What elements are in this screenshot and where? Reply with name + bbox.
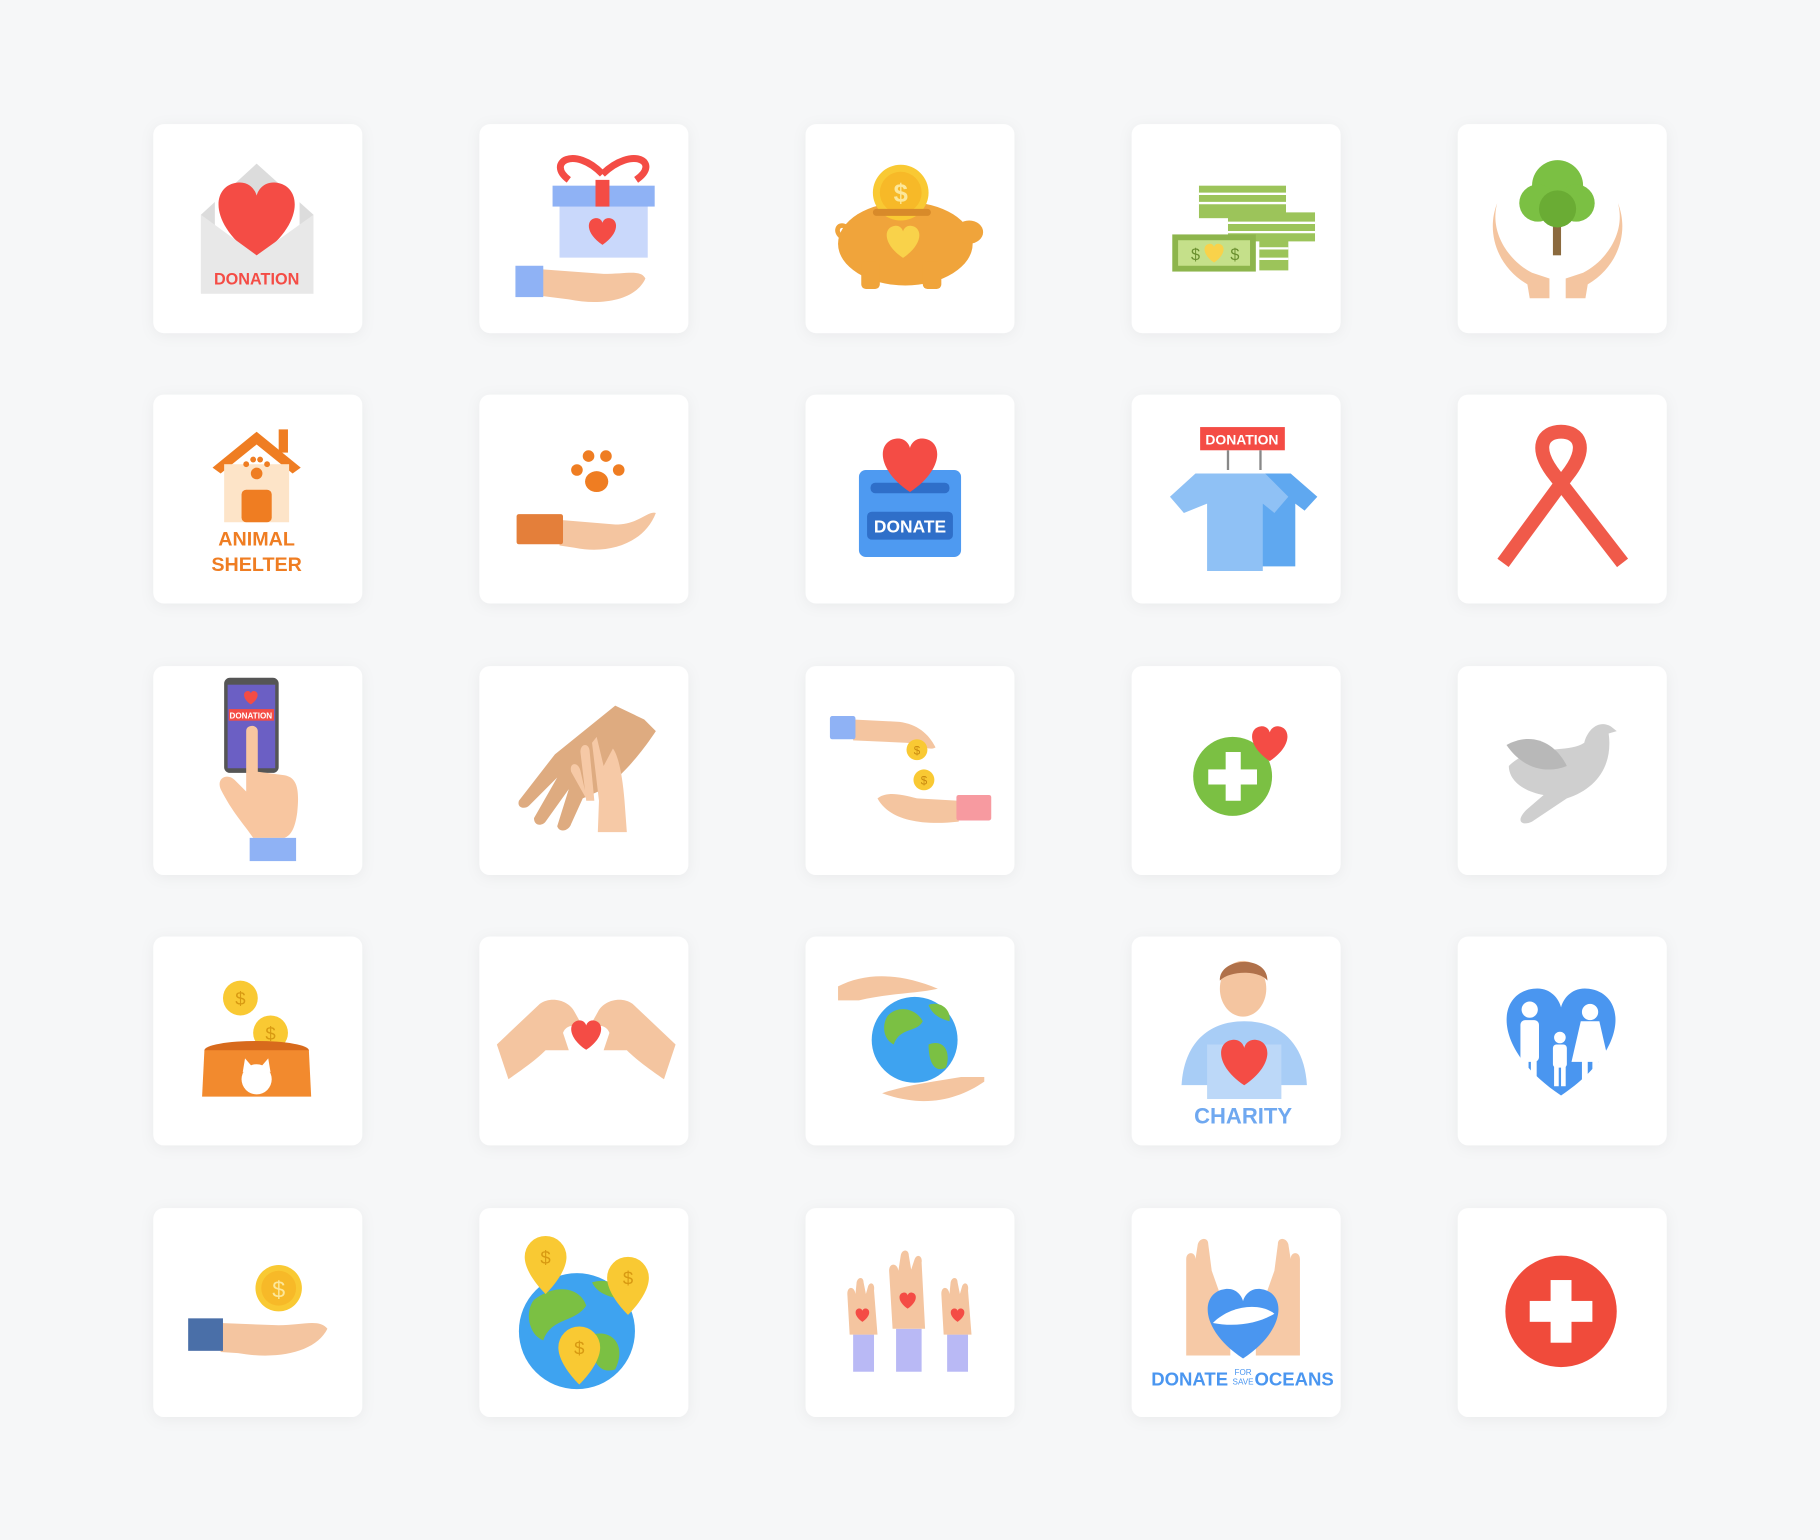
icon: animal shelter: ANIMAL (218, 528, 295, 550)
icon: phone donation (220, 678, 298, 861)
icon: hands with tree (1493, 160, 1622, 298)
icon: raised hands (847, 1250, 972, 1372)
icon: money stacks: $ (1230, 246, 1239, 264)
icon: cat bowl with coins: $ (265, 1023, 276, 1044)
icon: dove (1507, 724, 1617, 823)
icon: animal shelter (211, 429, 302, 576)
icon: donate box (859, 439, 961, 557)
icon: paw in hand (517, 450, 656, 550)
icon: coin exchange (830, 716, 991, 823)
icon: animal shelter: SHELTER (211, 554, 302, 576)
icon: piggy bank (837, 165, 983, 289)
icon: save oceans: DONATE (1151, 1369, 1228, 1390)
icon: gift in hand (515, 159, 655, 302)
icon: donated shirts (1170, 427, 1317, 571)
icon: cat bowl with coins: $ (235, 988, 246, 1009)
icon: save oceans: FOR (1235, 1368, 1252, 1377)
icon: coin exchange: $ (921, 775, 928, 788)
icon: globe in hands (838, 976, 984, 1101)
icon: globe with pins: $ (623, 1268, 634, 1289)
icon: medical heart (1193, 726, 1287, 816)
icon: donation envelope: DONATION (214, 270, 299, 288)
icon: cat bowl with coins (202, 981, 311, 1097)
icon: donate box: DONATE (874, 517, 946, 537)
icon: helping hands (518, 706, 656, 832)
icon: money stacks: $ (1191, 246, 1200, 264)
icon: coin exchange: $ (914, 744, 921, 757)
icon: donation envelope (201, 164, 313, 294)
icon: globe with pins (519, 1236, 649, 1389)
icon: save oceans: SAVE (1233, 1377, 1254, 1386)
icon: hand with coin (188, 1265, 327, 1356)
icon: save oceans: OCEANS (1254, 1369, 1334, 1390)
icon: family heart (1507, 988, 1615, 1096)
icon: charity person: CHARITY (1194, 1103, 1292, 1128)
icon: phone donation: DONATION (230, 711, 272, 720)
icon: awareness ribbon (1503, 432, 1623, 563)
icon: hand with coin: $ (272, 1276, 285, 1302)
icon: heart hands (497, 1000, 676, 1079)
icon: piggy bank: $ (894, 180, 908, 208)
icon: red cross (1505, 1256, 1617, 1367)
icon: save oceans (1151, 1239, 1334, 1390)
icon: globe with pins: $ (574, 1337, 585, 1358)
icon: charity person (1182, 961, 1307, 1128)
icon: globe with pins: $ (540, 1247, 551, 1268)
card grid (153, 124, 1667, 1417)
icon: money stacks (1172, 186, 1315, 272)
icon: donated shirts: DONATION (1205, 431, 1278, 447)
